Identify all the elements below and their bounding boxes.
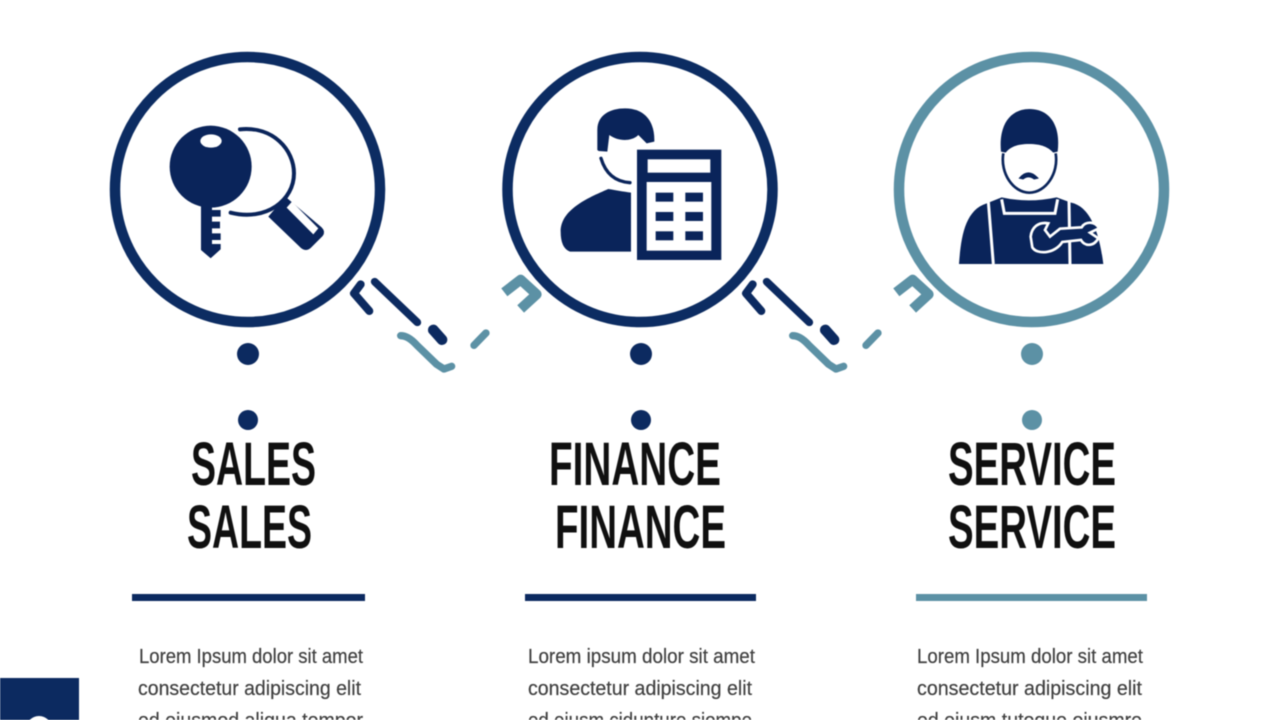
- sales divider: [132, 594, 365, 601]
- panel: sales: [115, 57, 380, 322]
- icon: key and magnifier: [170, 126, 324, 258]
- icon: mechanic with wrench: [959, 109, 1103, 264]
- heading: sales: SALES: [191, 430, 316, 498]
- heading: finance: FINANCE: [555, 493, 726, 561]
- service divider: [916, 594, 1147, 601]
- text block: finance: [528, 646, 755, 720]
- heading: service: [948, 430, 1116, 561]
- heading: finance: [549, 430, 726, 561]
- finance divider: [525, 594, 756, 601]
- connectors: first dashed bracket set: [354, 280, 537, 369]
- service circle ring: [899, 57, 1164, 322]
- heading: finance: FINANCE: [549, 430, 721, 498]
- heading: sales: SALES: [187, 493, 312, 561]
- heading: service: SERVICE: [948, 430, 1116, 498]
- panel: service: [899, 57, 1164, 322]
- finance circle ring: [508, 57, 772, 322]
- text block: service: consectetur adipiscing elit: [917, 678, 1142, 700]
- icon: person with calculator: [561, 108, 721, 260]
- service dots: [1021, 343, 1043, 430]
- connectors: second dashed bracket set: [746, 280, 929, 369]
- text block: finance: consectetur adipiscing elit: [528, 678, 752, 700]
- finance dots: [630, 343, 652, 430]
- corner badge: [0, 678, 79, 720]
- text block: service: [917, 646, 1143, 720]
- text block: sales: Lorem Ipsum dolor sit amet: [139, 646, 363, 668]
- heading: sales: [187, 430, 316, 561]
- text block: finance: Lorem ipsum dolor sit amet: [528, 646, 755, 668]
- panel: finance: [508, 57, 772, 322]
- text block: sales: consectetur adipiscing elit: [138, 678, 361, 700]
- text block: service: Lorem Ipsum dolor sit amet: [917, 646, 1143, 668]
- sales dots: [237, 343, 259, 430]
- text block: sales: [138, 646, 363, 720]
- heading: service: SERVICE: [948, 493, 1116, 561]
- sales circle ring: [115, 57, 380, 322]
